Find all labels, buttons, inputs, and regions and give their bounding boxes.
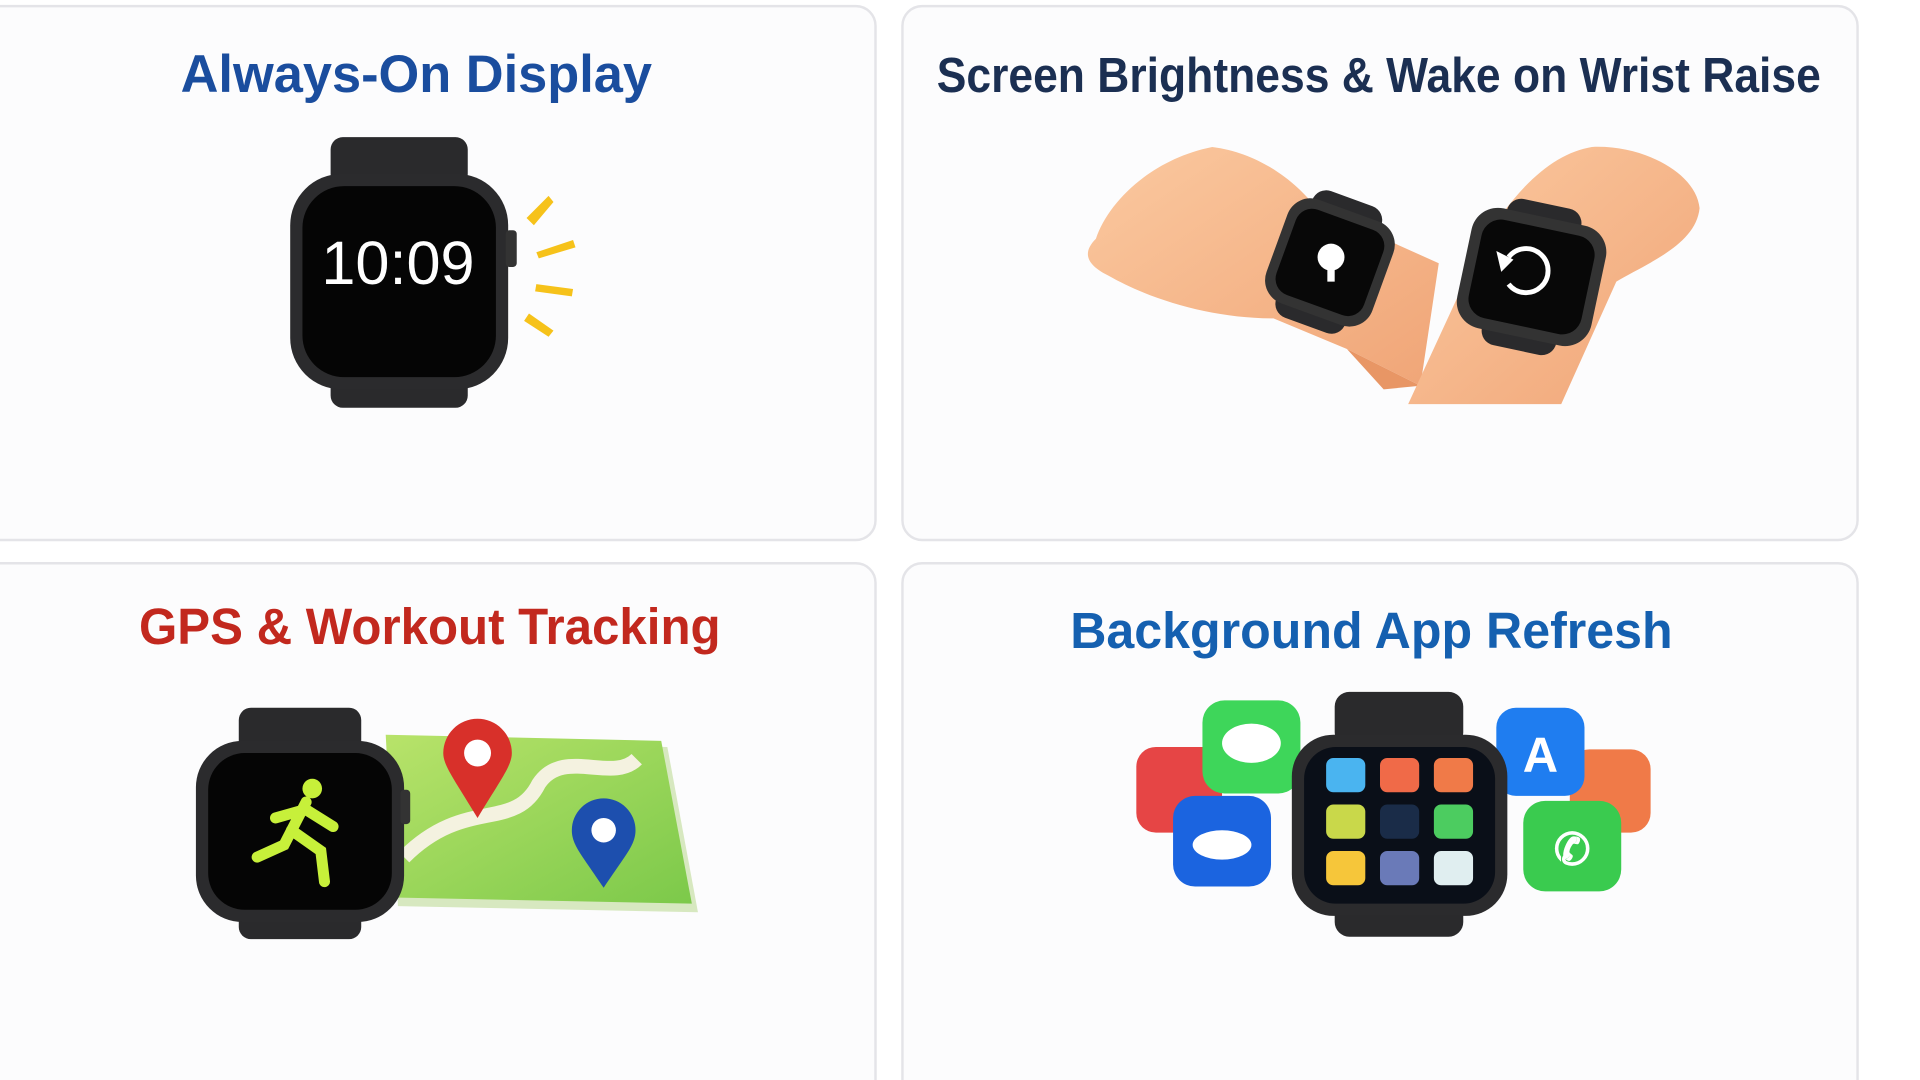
heading: gps & workout tracking: GPS & Workout Tracking (139, 597, 721, 655)
icons: app bubbles right (1496, 708, 1651, 891)
icon: glow rays (524, 196, 576, 337)
illustration: arm and watch right (1408, 147, 1700, 404)
icons: app bubbles right: ✆ (1554, 825, 1591, 874)
icon: watch with app grid (1292, 692, 1507, 937)
panel: screen brightness (902, 6, 1858, 540)
icon: blue pin (572, 798, 636, 888)
icon: watch with runner (196, 708, 410, 939)
illustration: map (386, 735, 698, 912)
illustration: hand and watch left (1088, 147, 1439, 389)
icons: app bubbles left (1136, 700, 1300, 887)
heading: always-on display: Always-On Display (181, 45, 652, 104)
icon: watch with time (290, 137, 517, 408)
icon: watch with time: 10:09 (321, 229, 475, 297)
panel: gps & workout (0, 563, 876, 1080)
panel: background app refresh (902, 563, 1858, 1080)
icon: red pin (443, 719, 512, 818)
icons: app bubbles right: A (1523, 728, 1558, 782)
panel: always-on display (0, 6, 876, 540)
heading: screen brightness & wake: Screen Brightness & Wake on Wrist Raise (937, 49, 1821, 103)
heading: background app refresh: Background App Refresh (1070, 601, 1673, 659)
